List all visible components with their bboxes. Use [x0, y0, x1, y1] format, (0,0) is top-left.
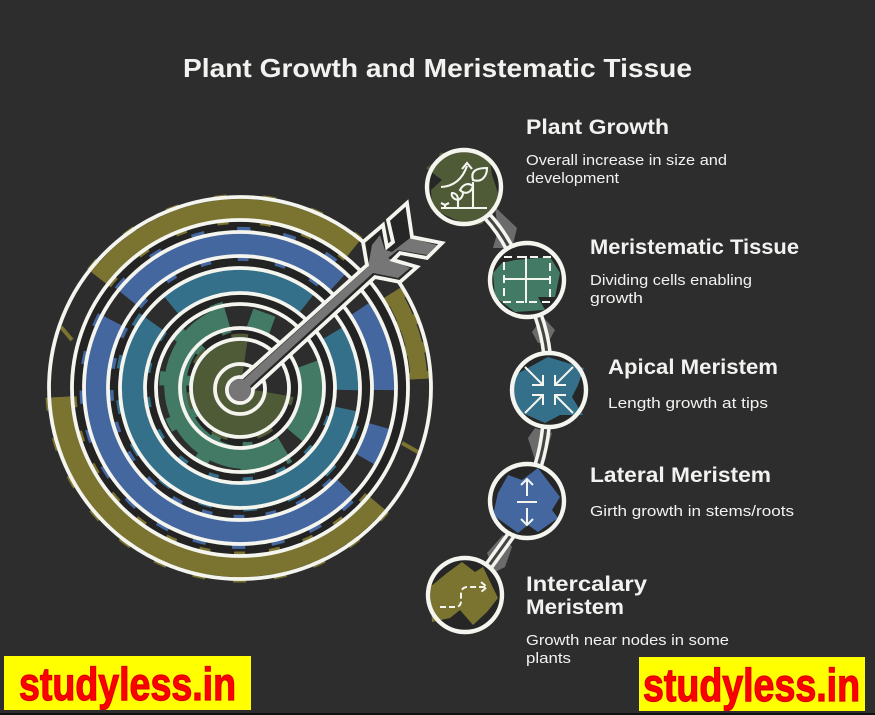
label: Apical Meristem — [608, 356, 778, 412]
label: Meristematic Tissue: Meristematic Tissue — [590, 236, 799, 259]
ring: olive outer band — [61, 209, 419, 567]
white rings — [49, 197, 431, 579]
node: Plant Growth icon — [426, 150, 501, 226]
label: Intercalary Meristem: Intercalary — [526, 573, 647, 596]
node: Intercalary Meristem icon — [428, 558, 502, 632]
label: Intercalary Meristem — [526, 573, 729, 667]
ring: centre olive band — [209, 357, 271, 419]
title: Plant Growth and Meristematic Tissue — [183, 53, 692, 83]
label: Plant Growth: development — [526, 171, 619, 187]
label: Intercalary Meristem: Growth near nodes in some — [526, 633, 729, 649]
watermark left: studyless.in — [19, 658, 236, 710]
label: Lateral Meristem — [590, 464, 794, 520]
ring: green band — [175, 317, 312, 458]
label: Lateral Meristem: Lateral Meristem — [590, 464, 771, 487]
node: Meristematic Tissue icon — [490, 243, 564, 317]
ring: teal band — [132, 280, 348, 494]
node: Lateral Meristem icon — [490, 464, 564, 538]
label: Intercalary Meristem: plants — [526, 651, 571, 667]
label: Meristematic Tissue: Dividing cells enabling — [590, 273, 752, 289]
label: Meristematic Tissue — [590, 236, 799, 307]
connector path — [487, 207, 555, 572]
label: Apical Meristem: Apical Meristem — [608, 356, 778, 379]
arrow — [227, 203, 442, 403]
ring: blue band — [97, 244, 384, 532]
label: Meristematic Tissue: growth — [590, 291, 643, 307]
label: Intercalary Meristem: Meristem — [526, 596, 624, 619]
label: Plant Growth: Plant Growth — [526, 116, 669, 139]
node: Apical Meristem icon — [512, 353, 586, 427]
label: Plant Growth: Overall increase in size and — [526, 153, 727, 169]
label: Plant Growth — [526, 116, 727, 187]
label: Apical Meristem: Length growth at tips — [608, 396, 768, 412]
label: Lateral Meristem: Girth growth in stems/roots — [590, 504, 794, 520]
